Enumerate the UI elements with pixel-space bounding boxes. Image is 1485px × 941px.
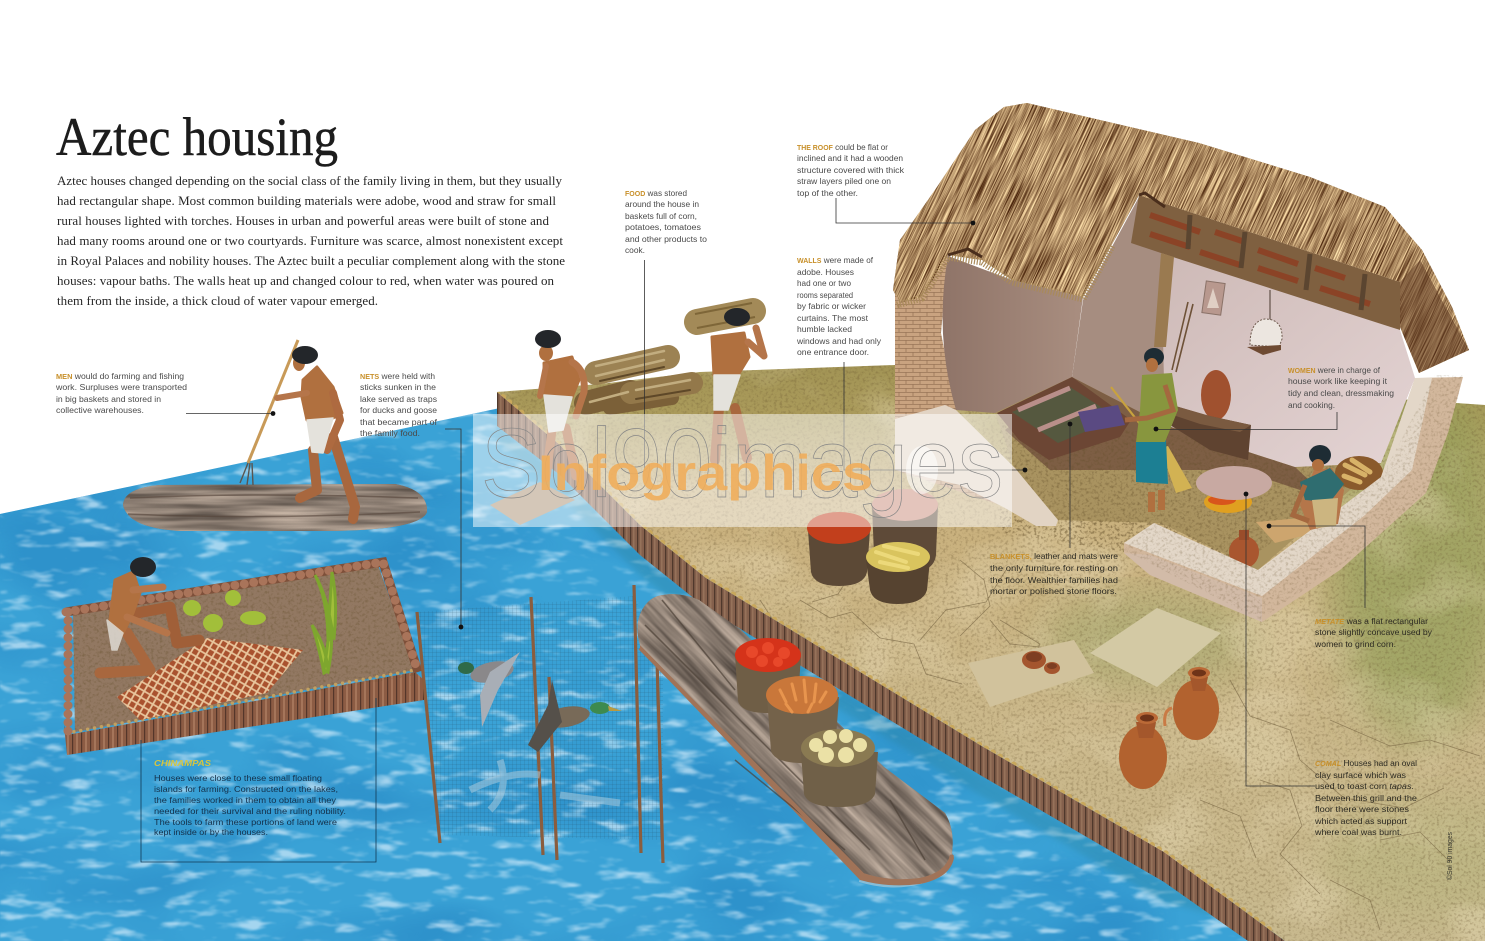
basket carrots — [767, 697, 839, 763]
callout: chinampas: The tools to farm these portions of land were — [154, 817, 337, 827]
boat with fisherman — [115, 340, 435, 535]
woman grinding — [1293, 445, 1344, 530]
panel: stake bank along the land edge — [497, 392, 1285, 941]
callout: blankets: BLANKETS, leather and mats were — [990, 551, 1118, 561]
farmer kneeling — [100, 557, 199, 673]
chinampa floating island — [60, 550, 430, 755]
callout: nets: lake served as traps — [360, 394, 437, 404]
large jar on bench — [1201, 370, 1231, 420]
comal — [1196, 466, 1272, 513]
left wall stump — [895, 405, 1058, 526]
metate — [1256, 518, 1318, 543]
sleeping mat with blankets — [997, 377, 1131, 460]
callout: comal: where coal was burnt. — [1314, 827, 1402, 837]
callout: walls: windows and had only — [796, 336, 882, 346]
intro text block: them from the inside, a thick cloud of water vapour emerged. — [57, 293, 378, 308]
credit: ©Sol 90 images — [1446, 832, 1454, 880]
callout: walls: curtains. The most — [797, 313, 869, 323]
callout: men: MEN would do farming and fishing — [56, 371, 184, 381]
callout: the roof — [797, 142, 905, 198]
callout: chinampas: islands for farming. Constructed on the lakes, — [154, 784, 338, 794]
baskets on the ground — [807, 489, 938, 604]
left inner wall — [943, 256, 1083, 413]
callout: blankets: the floor. Wealthier families had — [990, 575, 1118, 585]
callout: nets: that became part of — [360, 417, 438, 427]
callout: the roof: straw layers piled one on — [797, 176, 891, 186]
callout: food: around the house in — [625, 199, 699, 209]
man carrying log — [695, 303, 764, 460]
left outer brick wall — [895, 255, 1057, 525]
callout: metate: METATE was a flat rectangular — [1315, 616, 1428, 626]
callout: metate: stone slightly concave used by — [1315, 627, 1433, 637]
callout: men: work. Surpluses were transported — [55, 382, 187, 392]
callout: walls: WALLS were made of — [797, 255, 874, 265]
intro text block: houses: vapour baths. The walls heat up and changed colour to red, when water was poured on — [57, 273, 554, 288]
callout: food: cook. — [625, 245, 645, 255]
intro text block: had rectangular shape. Most common building materials were adobe, wood and straw for small — [57, 193, 556, 208]
callout: food — [625, 188, 707, 255]
thatched roof — [893, 103, 1469, 373]
callout: nets: sticks sunken in the — [360, 382, 436, 392]
mats on the ground — [968, 608, 1221, 707]
callout: chinampas: kept inside or by the houses. — [154, 827, 268, 837]
callout: men: collective warehouses. — [56, 405, 144, 415]
front wall cut — [1124, 377, 1463, 622]
intro text block — [57, 173, 565, 308]
panel: ground — [490, 360, 1485, 941]
ducks — [458, 652, 622, 810]
callout: nets: NETS were held with — [360, 371, 435, 381]
callout: women: house work like keeping it — [1288, 376, 1388, 386]
panel: house — [893, 103, 1469, 622]
callout: comal: used to toast corn tapas. — [1315, 781, 1414, 791]
callout: women: tidy and clean, dressmaking — [1288, 388, 1394, 398]
callout: women — [1288, 365, 1394, 410]
callout: comal: clay surface which was — [1315, 770, 1406, 780]
intro text block: in Royal Palaces and nobility houses. The Aztec built a peculiar complement along with the stone — [57, 253, 565, 268]
callout: blankets: mortar or polished stone floors. — [990, 586, 1117, 596]
watermark: Sol90images — [481, 408, 1003, 518]
callout: food: potatoes, tomatoes — [625, 222, 701, 232]
callout: food: baskets full of corn, — [625, 211, 697, 221]
bird net — [416, 585, 663, 863]
small jar — [1229, 530, 1259, 568]
callout: chinampas: needed for their survival and the ruling nobility. — [154, 806, 346, 816]
long wooden boat with baskets — [637, 594, 954, 888]
callout: comal: COMAL Houses had an oval — [1315, 758, 1417, 768]
middle wall — [1072, 197, 1176, 425]
callout: chinampas: CHINAMPAS — [154, 758, 211, 768]
roof fringe — [897, 246, 1112, 305]
floor — [995, 377, 1381, 570]
callout: walls: one entrance door. — [797, 347, 869, 357]
callout: walls: humble lacked — [797, 324, 852, 334]
intro text block: rural houses lighted with torches. Houses in urban and powerful areas were built of stone and — [57, 213, 550, 228]
clay jars — [1119, 667, 1219, 789]
intro text block: Aztec houses changed depending on the social class of the family living in them, but they usually — [57, 173, 562, 188]
leader lines — [141, 198, 1365, 862]
post and spears — [1154, 253, 1174, 347]
basket red — [735, 655, 801, 713]
callout: comal: floor there were stones — [1315, 804, 1409, 814]
bird cage — [1247, 290, 1282, 355]
callout: blankets: the only furniture for resting on — [990, 563, 1118, 573]
callout: walls — [796, 255, 882, 357]
wooden raft at shore — [490, 482, 575, 525]
wooden roof structure — [1131, 195, 1400, 330]
roof dark edge — [948, 193, 1165, 257]
woman sweeping — [1111, 348, 1192, 512]
basket squash — [801, 752, 878, 807]
callout: blankets — [990, 551, 1118, 596]
wall picture — [1202, 281, 1225, 315]
title: Aztec housing — [56, 107, 338, 167]
callout: walls: rooms separated — [797, 290, 853, 300]
watermark: Infographics — [538, 445, 873, 501]
callout: comal — [1314, 758, 1417, 837]
callout: nets: for ducks and goose — [360, 405, 437, 415]
callout: women: and cooking. — [1288, 400, 1335, 410]
callout: chinampas: the families worked in them to obtain all they — [154, 795, 337, 805]
callout: chinampas — [154, 758, 346, 837]
man walking by the logs — [535, 330, 584, 478]
callout: men: in big baskets and stored in — [56, 394, 161, 404]
callout: the roof: THE ROOF could be flat or — [797, 142, 888, 152]
callout: comal: which acted as support — [1314, 816, 1408, 826]
callout: the roof: top of the other. — [797, 188, 858, 198]
callout: the roof: inclined and it had a wooden — [797, 153, 903, 163]
callout: chinampas: Houses were close to these small floating — [154, 773, 322, 783]
panel: lake water — [0, 408, 1285, 941]
callout: the roof: structure covered with thick — [797, 165, 905, 175]
clay bowls — [1022, 651, 1060, 674]
callout: food: and other products to — [625, 234, 707, 244]
bench — [1170, 405, 1251, 460]
log pile — [586, 351, 692, 408]
callout: metate: women to grind corn. — [1314, 639, 1396, 649]
callout: nets: the family food. — [360, 428, 420, 438]
callout: food: FOOD was stored — [625, 188, 687, 198]
callout: walls: had one or two — [797, 278, 851, 288]
callout: women: WOMEN were in charge of — [1288, 365, 1381, 375]
callout: walls: by fabric or wicker — [797, 301, 866, 311]
callout: men — [55, 371, 187, 415]
callout: comal: Between this grill and the — [1315, 793, 1417, 803]
corn pile — [1335, 456, 1383, 490]
back wall — [1161, 250, 1415, 467]
callout: nets — [360, 371, 438, 438]
plants — [183, 572, 336, 673]
callout: walls: adobe. Houses — [797, 267, 854, 277]
intro text block: had many rooms around one or two courtyards. Furniture was scarce, almost nonexistent except — [57, 233, 563, 248]
callout: metate — [1314, 616, 1433, 649]
